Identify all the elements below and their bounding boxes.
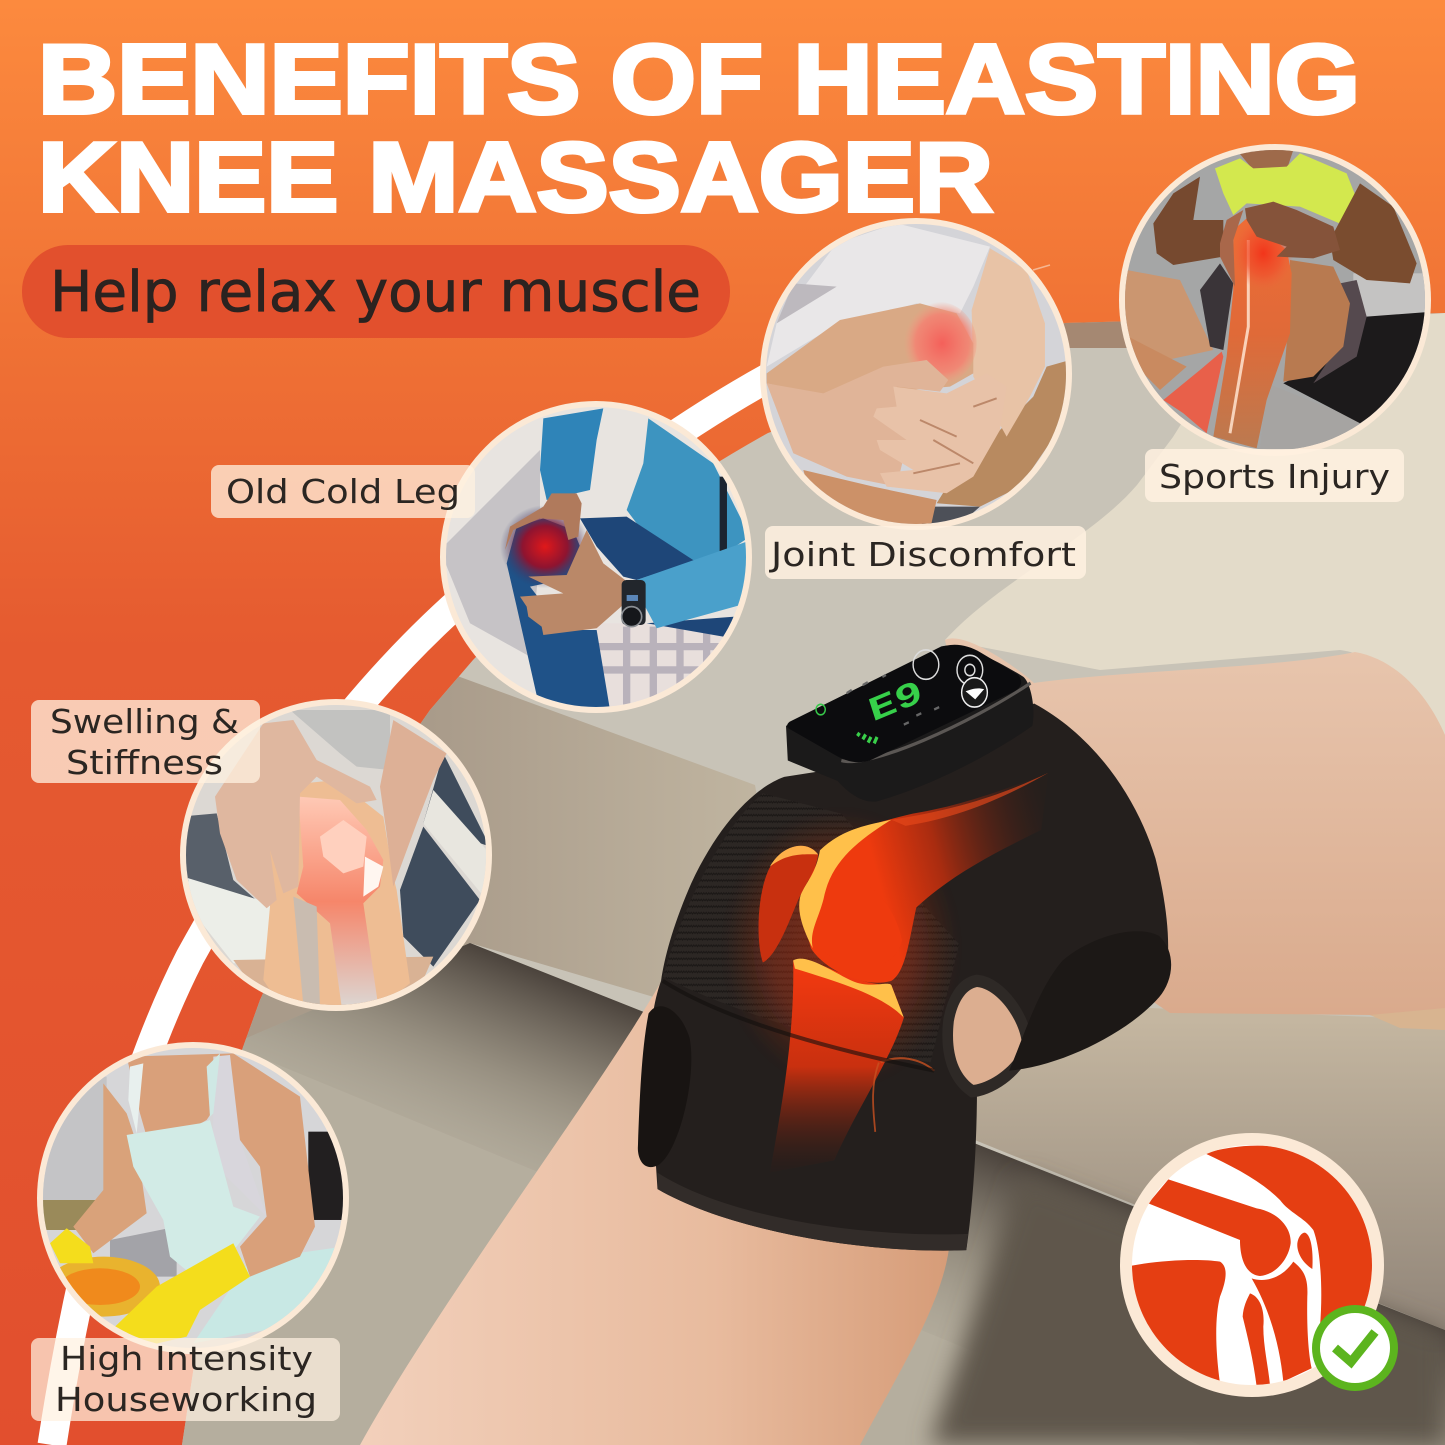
label: Joint Discomfort (765, 526, 1086, 579)
label: High Intensity Houseworking: High Intensity (60, 1339, 313, 1378)
lower sleeve band (657, 1173, 968, 1251)
photo circle: High Intensity Houseworking (33, 1042, 350, 1354)
photo circle: Swelling and Stiffness (180, 699, 492, 1011)
sofa front (244, 676, 756, 1042)
subtitle pill (22, 245, 730, 338)
label: High Intensity Houseworking (31, 1338, 340, 1421)
knee sleeve (650, 703, 1168, 1251)
sofa (182, 313, 1445, 1444)
subtitle pill: Help relax your muscle (50, 260, 701, 325)
fibula outline (873, 1058, 934, 1132)
shorts hem fragment (1370, 1008, 1445, 1030)
label: Swelling and Stiffness: Stiffness (66, 743, 223, 782)
button rings (913, 650, 939, 679)
label: Swelling and Stiffness (31, 700, 260, 783)
dark carpet right (930, 1175, 1445, 1445)
label: Sports Injury (1145, 449, 1404, 502)
shorts (945, 313, 1445, 735)
label: Old Cold Leg (211, 465, 475, 518)
check badge (1312, 1305, 1398, 1391)
knee massager product (638, 645, 1171, 1251)
title: BENEFITS OF HEASTING (38, 24, 1360, 134)
display digits: E9 (864, 673, 928, 732)
photo circle: Sports Injury (1119, 144, 1431, 450)
label: Joint Discomfort: Joint Discomfort (769, 535, 1076, 574)
title (38, 24, 1360, 232)
mesh panel (663, 793, 959, 1062)
heated patella (759, 846, 818, 963)
lower sofa (950, 1000, 1445, 1330)
fibula (1243, 1293, 1270, 1387)
photo circle: Joint Discomfort (760, 218, 1072, 526)
femur (1148, 1179, 1291, 1276)
heated femur (803, 773, 1048, 983)
indicators (847, 675, 939, 725)
sleeve strap shading (663, 981, 934, 1071)
heated tibia (770, 960, 904, 1173)
sofa top edge (1064, 322, 1126, 348)
knee opening ring (953, 987, 1022, 1085)
title: KNEE MASSAGER (38, 122, 993, 232)
icon: knee joint with check badge (1120, 1133, 1398, 1397)
label: Swelling and Stiffness: Swelling & (50, 702, 239, 741)
lower soft tissue (1127, 1260, 1226, 1387)
photo: person wearing knee massager on sofa (182, 313, 1445, 1445)
patella (1297, 1233, 1313, 1269)
touch screen (787, 645, 1021, 762)
thin streak (1033, 265, 1050, 270)
upper tissue (1205, 1146, 1373, 1327)
thigh (945, 638, 1445, 1030)
green icon (816, 704, 825, 715)
level bars (857, 733, 877, 743)
glow (724, 810, 959, 1087)
label: Sports Injury: Sports Injury (1159, 457, 1390, 496)
white arc (52, 374, 775, 1445)
femur highlight (799, 820, 891, 948)
carpet shadow under sofa (230, 943, 1445, 1445)
label: Old Cold Leg: Old Cold Leg (226, 472, 460, 511)
photo circle: Old Cold Leg (440, 401, 752, 713)
tibia (1252, 1262, 1312, 1382)
unit body (786, 646, 1033, 802)
control unit (786, 645, 1033, 802)
carpet (182, 1010, 1258, 1445)
label: High Intensity Houseworking: Houseworking (55, 1380, 317, 1419)
left strap (638, 1006, 691, 1167)
knee opening (953, 987, 1022, 1085)
right strap (1009, 931, 1171, 1071)
lower leg (360, 975, 950, 1445)
